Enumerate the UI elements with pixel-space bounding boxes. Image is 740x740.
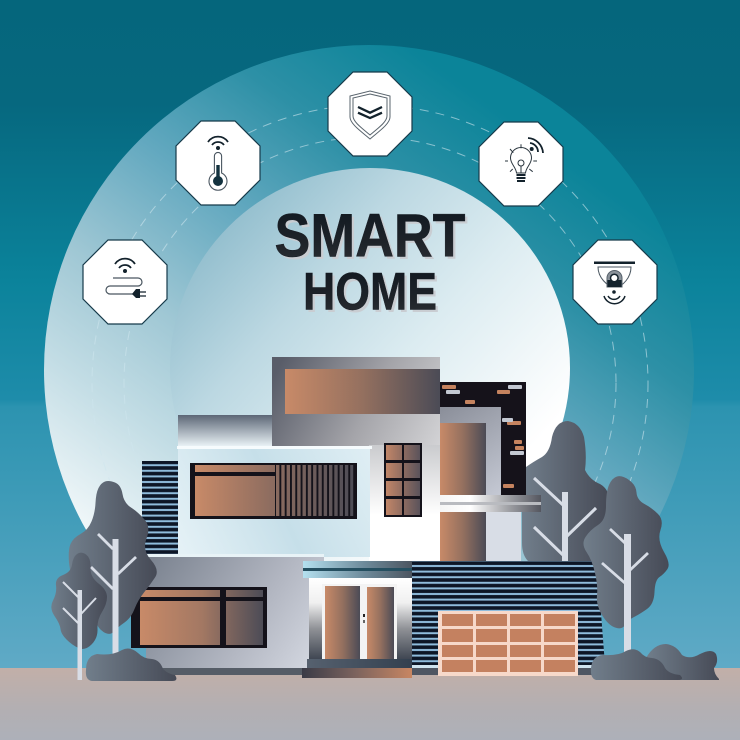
right stripes: [412, 561, 605, 665]
side stripes left: [142, 461, 179, 556]
title: [274, 202, 468, 324]
title line: SMART: SMART: [277, 204, 468, 272]
porch: [309, 578, 412, 660]
lower window: [131, 587, 267, 648]
porch step: [302, 659, 412, 678]
icon: smart light bulb: [479, 122, 563, 206]
white wall: [369, 445, 441, 563]
inner circle: [170, 168, 570, 568]
lower left block: [146, 556, 324, 668]
left roof block: [178, 415, 272, 446]
base band: [160, 668, 305, 675]
house: [131, 357, 605, 678]
left large tree: [69, 481, 157, 657]
main ledge: [177, 446, 372, 449]
dashed connection arcs: [92, 105, 648, 661]
garage door: [438, 611, 578, 676]
right back bush: [646, 644, 719, 680]
icon: security camera: [573, 240, 657, 324]
tower brown panel: [440, 423, 486, 495]
balcony band: [440, 495, 541, 512]
front right tree: [583, 476, 669, 654]
title line: HOME: HOME: [303, 262, 437, 322]
icon: security shield: [328, 72, 412, 156]
icon: wifi thermometer: [176, 121, 260, 205]
left small tree: [51, 553, 107, 680]
porch canopy: [303, 561, 412, 578]
title line: SMART: SMART: [274, 202, 466, 270]
grid window: [384, 443, 422, 517]
title line: HOME: HOME: [306, 265, 440, 324]
upper brown window: [285, 369, 440, 414]
right front bush: [591, 649, 682, 680]
icon: smart plug: [83, 240, 167, 324]
entrance doors: [322, 584, 397, 660]
lower ledge: [146, 554, 324, 557]
ground: [0, 668, 740, 740]
left bush: [86, 649, 176, 681]
garage plinth: [412, 668, 600, 675]
main wall: [178, 447, 370, 557]
back tree: [522, 421, 608, 562]
lower column: [440, 512, 521, 562]
outer circle: [44, 45, 694, 695]
garage base: [412, 665, 602, 668]
upper block: [272, 357, 440, 447]
slatted window: [190, 463, 357, 519]
brick tower: [440, 382, 526, 495]
